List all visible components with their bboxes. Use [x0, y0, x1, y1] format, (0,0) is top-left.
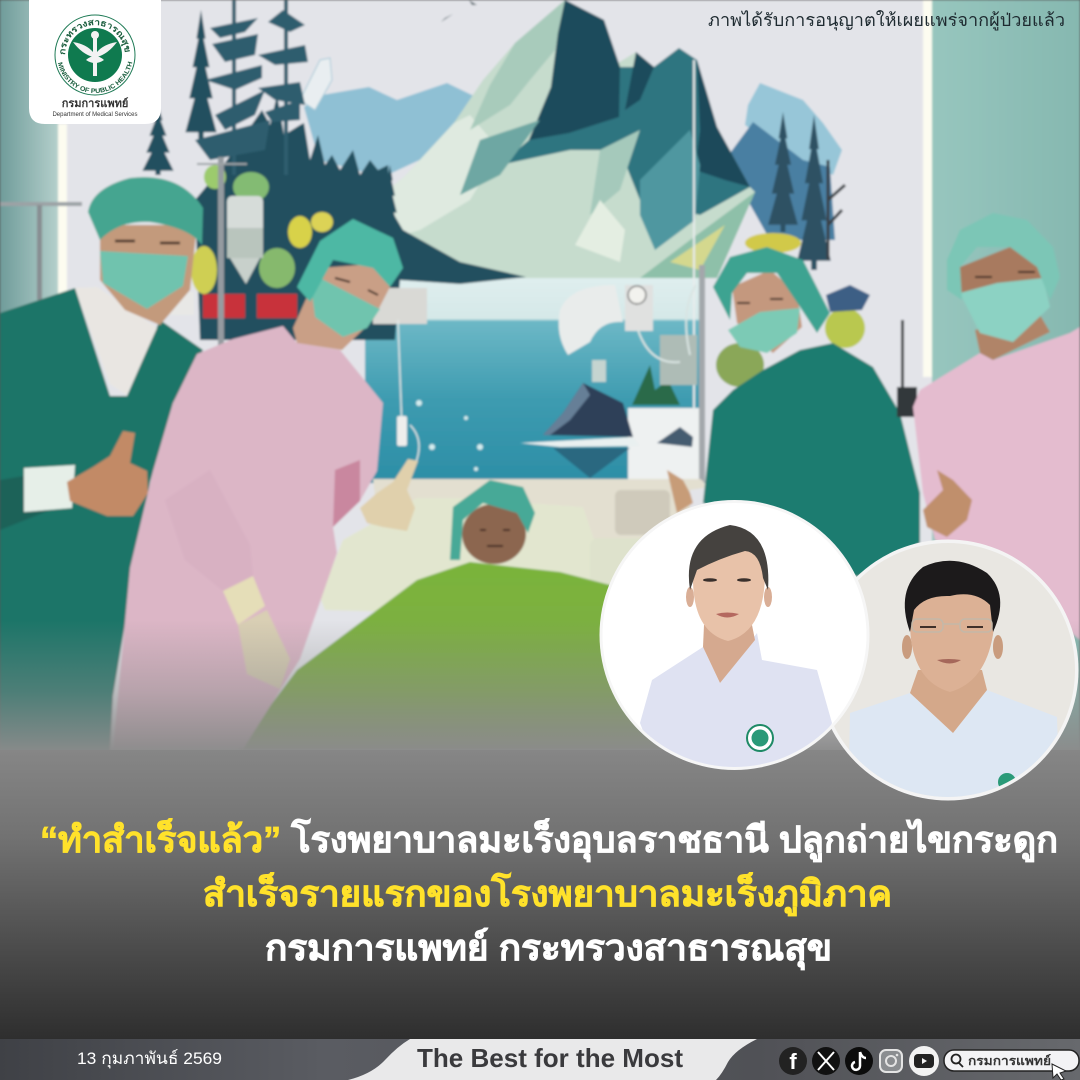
slogan: The Best for the Most	[417, 1043, 683, 1073]
search pill	[944, 1050, 1079, 1080]
mural: plants	[632, 365, 680, 405]
cap	[947, 213, 1060, 300]
right doctor emblem	[998, 773, 1015, 786]
person 1: green gown	[0, 177, 203, 756]
right doctor glasses	[912, 619, 992, 632]
photo: hospital room scene	[0, 0, 1080, 760]
icon: instagram	[880, 1050, 902, 1072]
left doctor mouth	[716, 612, 739, 618]
background fade to grey	[0, 620, 1080, 751]
person 4: pink gown	[913, 213, 1080, 640]
mural: rock in the lake	[520, 383, 693, 478]
mask	[312, 279, 380, 337]
right doctor face	[910, 585, 995, 692]
icon: X	[812, 1047, 840, 1075]
magnifier icon	[952, 1054, 963, 1067]
eyes	[975, 272, 1035, 277]
icon: youtube	[909, 1046, 939, 1076]
mural: distant blue mountains	[300, 58, 842, 240]
headline line 1: “ทำสำเร็จแล้ว” โรงพยาบาลมะเร็งอุบลราชธานี ปลูกถ่ายไขกระดูก	[40, 817, 1058, 863]
logo tab	[29, 0, 161, 124]
lower text panel	[0, 750, 1080, 1040]
right doctor mouth	[937, 659, 961, 664]
person 2: pink gown	[113, 219, 418, 749]
wall	[0, 0, 1080, 760]
headline	[40, 817, 1058, 971]
mural: right spruces	[768, 112, 845, 270]
person 3: green gown	[667, 247, 920, 577]
left doctor neck	[703, 625, 755, 683]
footer band	[0, 1039, 1080, 1080]
thumbs-up hand	[67, 431, 148, 516]
headline line 2: สำเร็จรายแรกของโรงพยาบาลมะเร็งภูมิภาค	[203, 871, 892, 917]
mural: main mountain	[376, 0, 755, 278]
wall sockets and red boxes	[163, 288, 427, 324]
left doctor face	[693, 542, 765, 641]
pillow	[320, 498, 612, 612]
icon: facebook: f	[789, 1049, 797, 1074]
portrait: right doctor	[832, 540, 1078, 800]
cap	[713, 247, 830, 333]
left doctor eyes	[703, 578, 751, 582]
teal side walls	[0, 0, 1080, 760]
head	[960, 247, 1045, 295]
IV stands and bag	[0, 60, 705, 483]
right doctor shirt	[850, 690, 1058, 797]
consent caption: ภาพได้รับการอนุญาตให้เผยแพร่จากผู้ป่วยแล้ว	[708, 10, 1065, 31]
mask	[100, 251, 188, 309]
light strips	[58, 0, 932, 377]
icon: tiktok	[845, 1047, 873, 1075]
patient head	[450, 480, 535, 564]
mask	[960, 278, 1050, 342]
mural: snow bank	[628, 408, 703, 483]
mural: lake	[365, 278, 705, 483]
cap	[88, 177, 203, 245]
neck	[975, 315, 1050, 360]
thumbs-up glove	[360, 459, 418, 531]
logo emblem: MINISTRY OF PUBLIC HEALTH	[58, 62, 132, 93]
thumb hand	[667, 470, 693, 513]
patient blanket	[237, 562, 680, 750]
mural: dark forest	[142, 10, 526, 340]
bed headboard	[373, 479, 704, 540]
mural: shrubs and rocks right	[716, 233, 870, 387]
portrait: left doctor	[600, 500, 870, 775]
glove cuff	[223, 576, 265, 625]
cursor icon	[1052, 1064, 1066, 1080]
left doctor ears	[686, 587, 772, 607]
mural: lake dots	[416, 400, 483, 471]
logo emblem	[54, 14, 136, 96]
headline line 3: กรมการแพทย์ กระทรวงสาธารณสุข	[265, 927, 832, 971]
right doctor neck	[910, 670, 987, 733]
wrist cuff	[24, 465, 75, 512]
right doctor hair	[905, 561, 1000, 632]
thumb hand	[923, 470, 972, 537]
monitor and antenna	[897, 320, 917, 417]
eyes	[737, 299, 783, 303]
eyes	[115, 241, 180, 243]
left doctor hair	[689, 525, 768, 590]
mural: shrubs left	[191, 165, 333, 294]
logo emblem: กระทรวงสาธารณสุข	[60, 20, 130, 54]
bed side panel and right pillow	[590, 490, 670, 588]
lower glove	[238, 610, 290, 689]
right doctor ears	[902, 635, 1003, 659]
cap	[297, 219, 403, 302]
pulse oximeter cable	[397, 320, 419, 465]
head	[100, 225, 197, 325]
left doctor emblem	[747, 725, 773, 751]
oxygen equipment	[559, 285, 697, 385]
head	[732, 270, 802, 353]
mural: tall pine centre	[258, 0, 308, 175]
search text: กรมการแพทย์	[968, 1054, 1051, 1068]
mask	[728, 308, 800, 353]
icon: facebook	[779, 1047, 807, 1075]
footer white slogan shape	[348, 1039, 757, 1080]
mural: birds	[441, 0, 477, 22]
left doctor shirt	[640, 633, 832, 775]
caduceus	[73, 31, 117, 76]
logo english name: Department of Medical Services	[52, 112, 138, 118]
eyes	[335, 278, 378, 295]
mural: tall pine left	[195, 0, 270, 175]
right doctor eyes	[920, 626, 983, 628]
neck and face	[293, 264, 390, 350]
date: 13 กุมภาพันธ์ 2569	[77, 1049, 222, 1069]
logo department name: กรมการแพทย์	[62, 97, 128, 110]
